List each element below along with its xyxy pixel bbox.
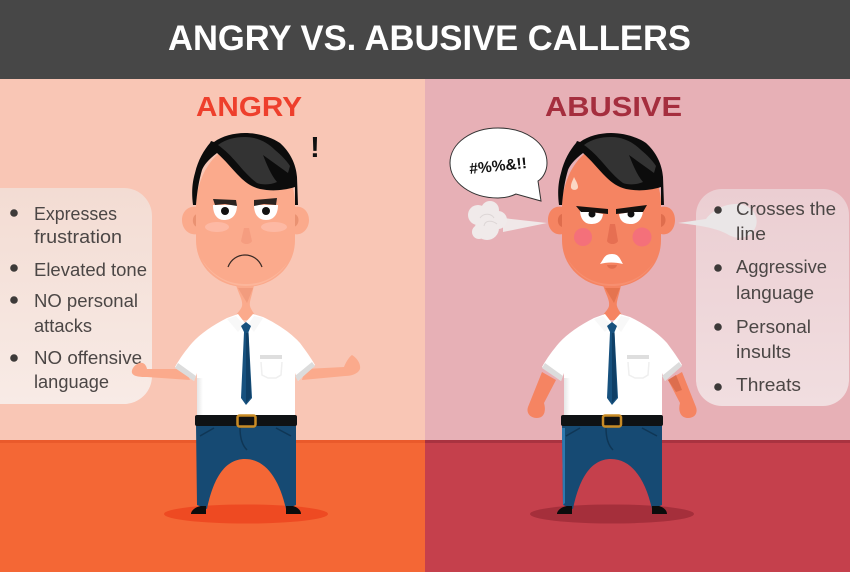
hair highlight — [218, 137, 290, 184]
sleeve cuffs — [175, 362, 315, 381]
panel: abusive traits list: language — [736, 282, 814, 303]
heading: angry: ANGRY — [196, 91, 302, 122]
sleeve cuffs — [542, 362, 682, 381]
cheeks — [574, 228, 592, 246]
shirt pocket — [627, 355, 649, 359]
steam cloud: right ear — [678, 204, 757, 238]
floor shadow — [530, 504, 694, 524]
arms — [132, 355, 360, 380]
eyes — [213, 205, 278, 220]
shoes — [557, 506, 667, 514]
cheeks — [205, 222, 229, 232]
hair — [558, 133, 664, 205]
eyebrows — [576, 205, 647, 214]
collar — [227, 316, 263, 332]
trouser creases — [566, 428, 657, 450]
trousers — [562, 425, 662, 509]
belt — [561, 415, 663, 426]
trousers — [196, 425, 296, 509]
speech bubble — [450, 128, 547, 201]
trouser highlight — [562, 428, 565, 505]
panel: angry traits list — [0, 188, 152, 404]
shirt pocket — [260, 355, 282, 359]
shirt side shading — [197, 378, 203, 415]
shirt — [542, 314, 682, 415]
tie — [607, 322, 618, 405]
panel: abusive background — [425, 79, 850, 572]
figure: angry caller — [132, 133, 360, 524]
face — [196, 142, 295, 287]
sweat drop — [571, 177, 578, 190]
shirt side shading — [564, 378, 570, 415]
hair highlight — [584, 137, 656, 184]
panel: angry background — [0, 79, 425, 572]
panel: angry traits list: Elevated tone — [34, 259, 147, 280]
figure: abusive caller — [527, 133, 697, 524]
belt — [195, 415, 297, 426]
panel: angry traits list: NO offensive — [34, 347, 142, 368]
collar — [594, 316, 630, 332]
neck — [232, 285, 258, 320]
steam cloud: left ear — [468, 201, 547, 240]
panel: abusive traits list — [678, 189, 849, 406]
panel: angry traits list: NO personal — [34, 290, 138, 311]
floor shadow — [164, 504, 328, 524]
belt buckle — [238, 416, 256, 426]
heading: abusive: ABUSIVE — [545, 91, 682, 122]
face — [562, 142, 661, 287]
ears — [182, 207, 309, 234]
chin shade — [607, 265, 617, 269]
speech bubble: #%%&!! — [469, 155, 528, 178]
neck — [599, 285, 625, 320]
panel: abusive traits list: Aggressive — [736, 256, 827, 277]
panel: abusive traits list: insults — [736, 341, 791, 362]
arms — [527, 372, 697, 418]
shirt — [175, 314, 315, 415]
tie — [241, 322, 252, 405]
belt buckle — [603, 416, 621, 426]
eyebrows — [213, 198, 277, 206]
trouser creases — [200, 428, 291, 450]
nose — [607, 224, 618, 244]
panel: angry traits list: frustration — [34, 226, 122, 247]
panel: abusive traits list: line — [736, 223, 766, 244]
title banner: ANGRY VS. ABUSIVE CALLERS — [168, 19, 691, 58]
panel: angry traits list: language — [34, 371, 109, 392]
eyes — [580, 210, 643, 224]
hair — [192, 133, 298, 205]
panel: angry traits list: Expresses — [34, 203, 117, 224]
panel: angry traits list: attacks — [34, 315, 92, 336]
ears — [548, 207, 675, 234]
nose — [241, 228, 252, 244]
mouth — [600, 254, 623, 264]
panel: abusive traits list: Threats — [736, 374, 801, 395]
panel: abusive traits list: Personal — [736, 316, 811, 337]
title banner — [0, 0, 850, 79]
shoes — [191, 506, 301, 514]
mouth — [228, 255, 262, 267]
exclamation mark: ! — [310, 132, 320, 164]
panel: abusive traits list: Crosses the — [736, 198, 836, 219]
